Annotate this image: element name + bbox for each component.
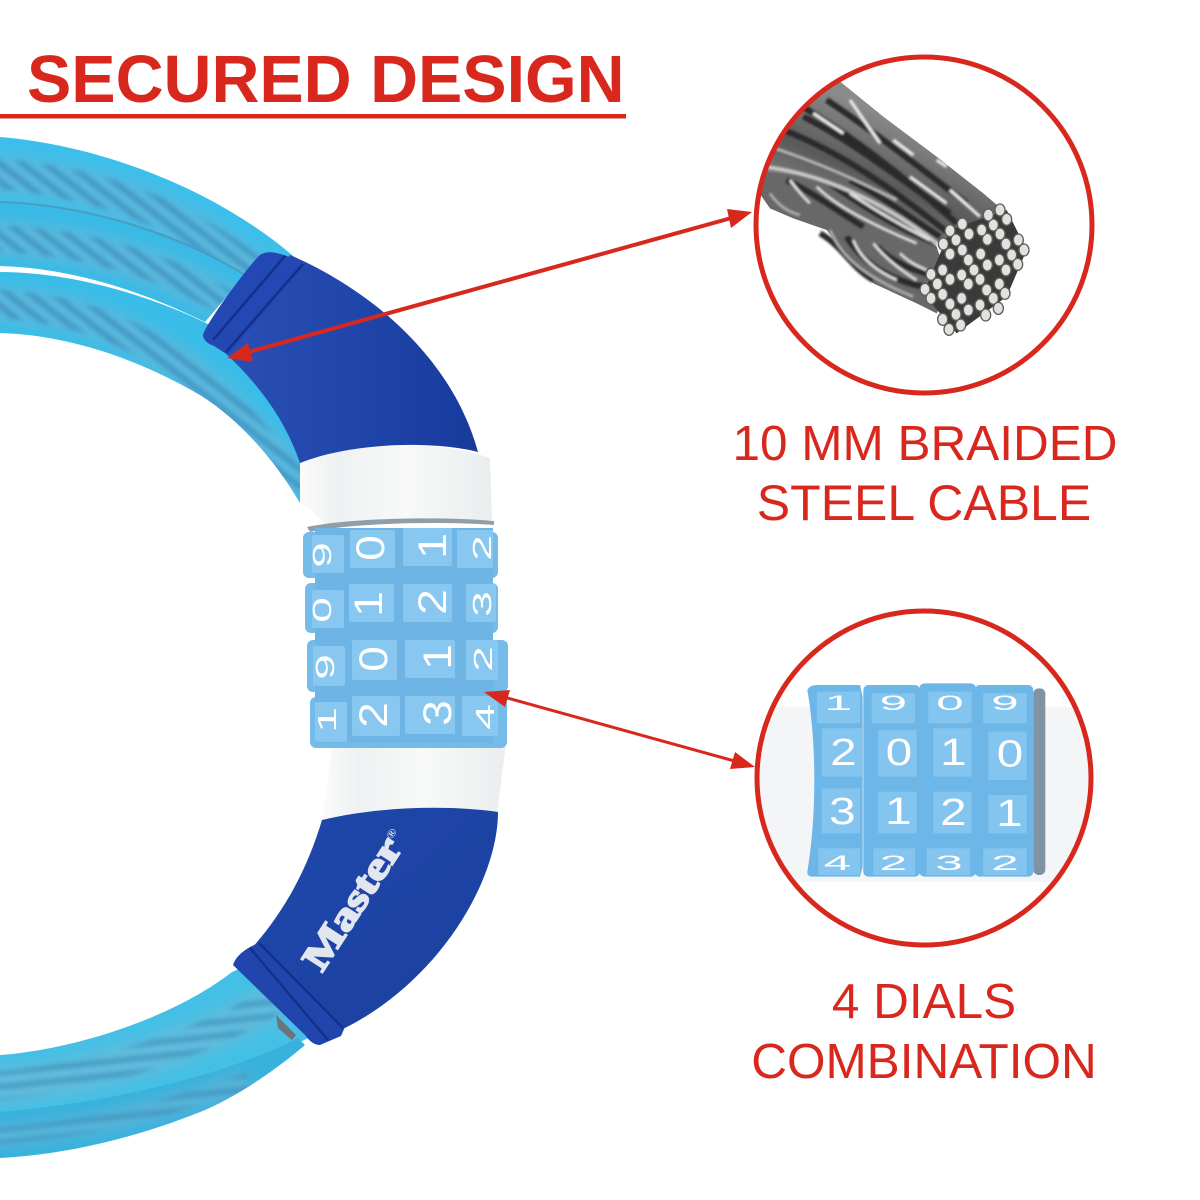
circle dial digits: 2 [830, 731, 857, 774]
lower white tube [322, 735, 507, 822]
combination dials [303, 528, 508, 748]
upper blue sleeve [203, 252, 478, 463]
combination cable lock [0, 137, 508, 1158]
caption: 4 dials combination [751, 974, 1097, 1089]
dial digits: 4 [470, 704, 500, 730]
dial digits: 9 [310, 654, 340, 680]
dial digits: 2 [411, 589, 455, 615]
circle dial digits: 1 [940, 731, 967, 774]
braided steel cable illustration [743, 73, 1029, 335]
dial digits: 1 [416, 644, 460, 670]
upper white tube [300, 444, 492, 525]
circle dial digits: 1 [825, 692, 852, 715]
circle dial digits: 0 [997, 733, 1023, 775]
panel: steel cable detail [732, 57, 1118, 531]
brand logo: ® [384, 826, 400, 842]
circle dial digits: 3 [829, 790, 856, 833]
lower blue sleeve with Master logo [233, 808, 498, 1045]
circle dial digits: 1 [885, 790, 912, 833]
dial digits [307, 533, 500, 733]
dial digits: 1 [347, 591, 391, 617]
upper cable strands [0, 137, 330, 503]
dial digits: 1 [411, 533, 455, 559]
circle dial digits: 2 [940, 791, 967, 834]
circle dial digits: 2 [991, 852, 1019, 875]
caption: 10 mm braided steel cable: 10 MM BRAIDED [732, 416, 1118, 471]
dial digits: 0 [352, 646, 396, 672]
dial digits: 2 [352, 702, 396, 728]
dial digits: 2 [468, 646, 498, 672]
caption: 4 dials combination: 4 DIALS [832, 974, 1016, 1029]
panel: 4 dials detail [751, 611, 1097, 1089]
arrow: sleeve to steel cable [227, 209, 752, 362]
brand logo: Master [294, 858, 393, 978]
caption: 4 dials combination: COMBINATION [751, 1034, 1097, 1089]
circle dial digits: 2 [880, 852, 907, 875]
circle dial digits: 4 [824, 852, 851, 875]
dial digits: 2 [467, 535, 497, 561]
four dial combination illustration [757, 683, 1090, 882]
dial digits: 0 [307, 597, 337, 623]
circle dial digits [824, 692, 1023, 875]
dial number tiles [312, 528, 498, 742]
red circle frame [757, 611, 1091, 945]
circle dial digits: 9 [880, 692, 907, 715]
lower cable strands [0, 960, 325, 1158]
title: SECURED DESIGN [27, 43, 625, 117]
circle dial digits: 1 [996, 792, 1023, 835]
caption: 10 mm braided steel cable [732, 416, 1118, 531]
circle dial digits: 0 [936, 692, 964, 715]
caption: 10 mm braided steel cable: STEEL CABLE [757, 475, 1091, 531]
dial digits: 0 [349, 535, 393, 561]
dial digits: 3 [416, 700, 460, 726]
dial bodies [303, 528, 508, 748]
circle dial digits: 3 [935, 852, 963, 875]
circle dial digits: 9 [991, 692, 1019, 715]
dial digits: 9 [307, 542, 337, 568]
dial digits: 1 [312, 707, 342, 733]
dial digits: 3 [467, 591, 497, 617]
arrow: dials to combination detail [484, 690, 755, 769]
red circle frame [756, 57, 1092, 393]
circle dial digits: 0 [886, 731, 912, 774]
metal ring [307, 518, 494, 532]
